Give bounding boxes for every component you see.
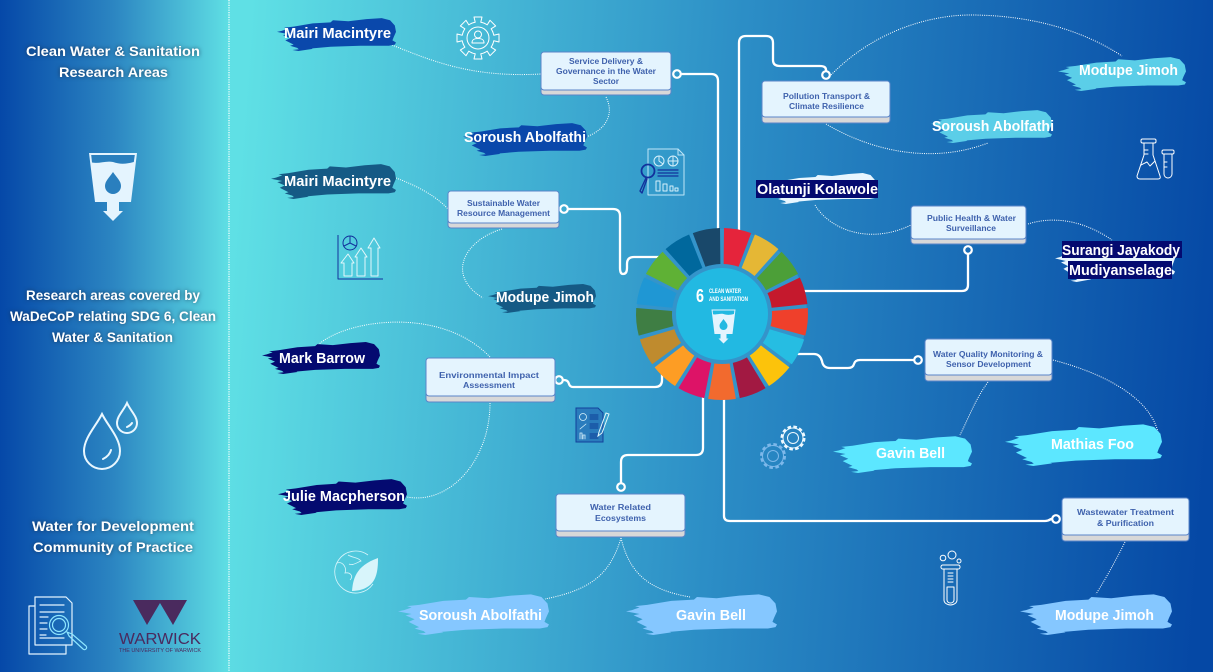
name: Modupe Jimoh (pollution): Modupe Jimoh: [1079, 63, 1178, 79]
box: Service Delivery & Governance: Sector: [593, 76, 620, 86]
name: Gavin Bell (ecosystems): Gavin Bell: [676, 608, 746, 624]
icon: assessment document with pen: [576, 408, 609, 442]
name: Surangi Jayakody Mudiyanselage: Surangi Jayakody: [1062, 243, 1180, 259]
icon: test tube with bubbles: [940, 551, 961, 605]
name: Olatunji Kolawole: Olatunji Kolawole: [757, 182, 878, 198]
icon: water drops: [84, 403, 137, 469]
icon: gears: [762, 427, 804, 468]
name: Modupe Jimoh (wastewater): [1020, 594, 1172, 635]
box: Environmental Impact Assessment: Assessment: [463, 380, 515, 390]
background: left sidebar gradient: [0, 0, 229, 672]
text block: community of practice: Water for Development: [32, 519, 195, 534]
box: Public Health & Water Surveillance: [911, 206, 1026, 244]
logo: University of Warwick: [119, 600, 202, 654]
name: Mark Barrow: [262, 342, 380, 374]
arrow: connector to Environmental Impact: [564, 374, 662, 387]
arrow: connector to Service Delivery: [682, 74, 718, 240]
box: Sustainable Water Resource Management: Sustainable Water: [467, 198, 541, 208]
name: Julie Macpherson: Julie Macpherson: [283, 489, 405, 505]
icon: gear with person: [457, 17, 499, 59]
name: Soroush Abolfathi (pollution): [931, 110, 1054, 143]
box: Environmental Impact Assessment: Environmental Impact: [439, 370, 539, 380]
box: Sustainable Water Resource Management: [448, 191, 559, 228]
name: Mark Barrow: Mark Barrow: [279, 351, 366, 367]
box: Water Quality Monitoring & Sensor Development: [925, 339, 1052, 381]
dotted link: Julie Macpherson to Environmental Impact: [407, 403, 490, 498]
arrow: connector to Sustainable Water: [569, 209, 660, 274]
wheel centre label: CLEAN WATER: [709, 288, 741, 295]
dotted link: Modupe Jimoh to Pollution Transport: [831, 15, 1122, 75]
name: Soroush Abolfathi (ecosystems): [398, 594, 549, 635]
dotted link: Modupe Jimoh to Sustainable Water: [463, 229, 502, 298]
name: Mairi Macintyre (service delivery): Mairi Macintyre: [284, 26, 391, 42]
box: Service Delivery & Governance: Governance in the Water: [556, 66, 657, 76]
box: Wastewater Treatment & Purification: Wastewater Treatment: [1077, 507, 1174, 517]
name: Modupe Jimoh (pollution): [1058, 57, 1186, 91]
arrow: connector to Pollution Transport: [739, 36, 826, 232]
dotted link: Mairi Macintyre to Service Delivery: [392, 45, 541, 75]
box: Environmental Impact Assessment: [426, 358, 555, 402]
icon: globe and leaf: [335, 551, 378, 593]
box: Public Health & Water Surveillance: Public Health & Water: [927, 213, 1017, 223]
icon: flask and test tube: [1137, 139, 1174, 179]
name: Mairi Macintyre (service delivery): [277, 18, 396, 51]
text block: community of practice: [32, 519, 195, 555]
chart: SDG colour wheel: [635, 227, 809, 400]
icon: report with magnifier: [640, 149, 684, 195]
box: Wastewater Treatment & Purification: [1062, 498, 1189, 541]
icon: growth chart with arrows: [338, 235, 383, 279]
dotted link: Soroush Abolfathi to Water Related: [545, 538, 621, 599]
text block: community of practice: Community of Practice: [33, 540, 194, 555]
dotted link: Soroush Abolfathi to Service Delivery: [586, 97, 609, 137]
name: Mairi Macintyre (water resources): [271, 164, 396, 199]
name: Soroush Abolfathi (service delivery): [463, 123, 587, 156]
name: Surangi Jayakody Mudiyanselage: Mudiyanselage: [1069, 263, 1172, 279]
heading: research areas: Research Areas: [59, 65, 168, 80]
box: Public Health & Water Surveillance: Surveillance: [946, 223, 996, 233]
dotted link: Mathias Foo to Water Quality: [1053, 360, 1158, 432]
dotted link: Mairi Macintyre to Sustainable Water: [396, 178, 448, 209]
wheel centre label: AND SANITATION: [709, 296, 748, 303]
arrow: connector to Public Health: [800, 255, 968, 291]
logo: University of Warwick: THE UNIVERSITY OF WARWICK: [119, 648, 202, 654]
name: Modupe Jimoh (water resources): [488, 284, 596, 313]
name: Mathias Foo: Mathias Foo: [1051, 437, 1134, 453]
box: Water Quality Monitoring & Sensor Development: Water Quality Monitoring &: [933, 349, 1043, 359]
dotted link: Gavin Bell to Water Related: [621, 538, 690, 597]
dotted link: Gavin Bell to Water Quality: [960, 382, 988, 435]
name: Soroush Abolfathi (service delivery): Soroush Abolfathi: [464, 130, 586, 146]
name: Olatunji Kolawole: [756, 173, 878, 204]
wheel centre disc: [676, 268, 768, 360]
name: Julie Macpherson: [278, 479, 407, 515]
box: Wastewater Treatment & Purification: & Purification: [1097, 518, 1154, 528]
panel: left sidebar: [10, 44, 216, 654]
dotted link: Olatunji Kolawole to Public Health: [815, 205, 911, 234]
arrow: connector to Water Quality: [798, 354, 913, 368]
text block: research areas description: Water & Sanitation: [52, 330, 173, 345]
name: Modupe Jimoh (wastewater): Modupe Jimoh: [1055, 608, 1154, 624]
icon: document with magnifier: [29, 597, 87, 654]
dotted link: Surangi Jayakody to Public Health: [1028, 220, 1112, 240]
arrow: connector to Wastewater Treatment: [724, 398, 1051, 521]
name: Gavin Bell (water quality): Gavin Bell: [876, 446, 945, 462]
box: Water Related Ecosystems: Water Related: [590, 502, 651, 512]
name: Modupe Jimoh (water resources): Modupe Jimoh: [496, 290, 594, 306]
wheel centre number: 6: [696, 286, 704, 306]
dotted link: Mark Barrow to Environmental Impact: [318, 322, 490, 357]
arrow: connector to Water Related Ecosystems: [621, 395, 703, 482]
box: Water Related Ecosystems: [556, 494, 685, 537]
connector nodes: [555, 70, 1060, 523]
icon: SDG 6 water glass: [89, 153, 137, 221]
name: Mathias Foo: [1005, 424, 1162, 466]
wheel centre label: [709, 288, 748, 303]
heading: research areas: [26, 44, 200, 80]
box: Pollution Transport & Climate Resilience: Pollution Transport &: [783, 91, 870, 101]
box: Water Related Ecosystems: Ecosystems: [595, 513, 646, 523]
name: Soroush Abolfathi (ecosystems): Soroush Abolfathi: [419, 608, 542, 624]
text block: research areas description: [10, 288, 216, 345]
logo: University of Warwick: WARWICK: [119, 631, 202, 648]
name: Gavin Bell (ecosystems): [626, 594, 777, 635]
box: Sustainable Water Resource Management: Resource Management: [457, 208, 550, 218]
wheel centre water glass icon: [712, 310, 736, 344]
heading: research areas: Clean Water & Sanitation: [26, 44, 200, 59]
name: Gavin Bell (water quality): [833, 436, 972, 473]
dotted link: Soroush Abolfathi to Pollution Transport: [826, 124, 988, 154]
box: Pollution Transport & Climate Resilience: Climate Resilience: [789, 101, 864, 111]
dotted link: Modupe Jimoh to Wastewater: [1096, 542, 1125, 594]
name: Surangi Jayakody Mudiyanselage: [1055, 241, 1182, 282]
box: Pollution Transport & Climate Resilience: [762, 81, 890, 123]
box: Water Quality Monitoring & Sensor Development: Sensor Development: [946, 359, 1031, 369]
box: Service Delivery & Governance: Service Delivery &: [569, 56, 643, 66]
box: Service Delivery & Governance: [541, 52, 671, 95]
name: Mairi Macintyre (water resources): Mairi Macintyre: [284, 174, 391, 190]
text block: research areas description: WaDeCoP relating SDG 6, Clean: [10, 309, 216, 324]
name: Soroush Abolfathi (pollution): Soroush Abolfathi: [932, 119, 1054, 135]
text block: research areas description: Research areas covered by: [26, 288, 200, 303]
